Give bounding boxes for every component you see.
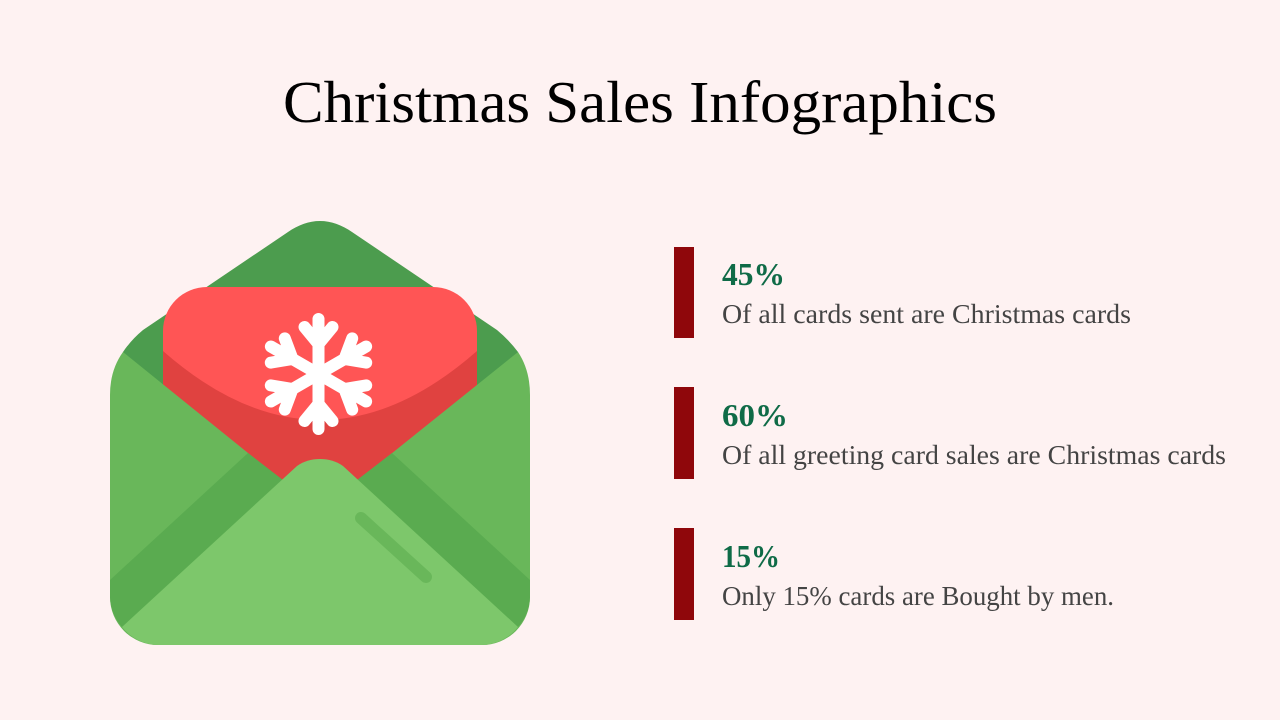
value: 15% — [722, 538, 780, 574]
envelope front flap — [122, 459, 518, 645]
stat: 15% — [674, 528, 1114, 620]
stat: 45% — [674, 247, 1131, 338]
description: Of all greeting card sales are Christmas cards — [722, 440, 1226, 470]
bar — [674, 247, 694, 338]
stat: 60% — [674, 387, 1226, 479]
value: 45% — [722, 256, 785, 292]
icon: snowflake — [264, 319, 373, 429]
value: 60% — [722, 397, 788, 433]
envelope side panels — [110, 352, 530, 645]
envelope back flap — [110, 221, 530, 500]
icon: open envelope with card — [110, 221, 530, 645]
flap highlight — [361, 518, 426, 577]
description: Only 15% cards are Bought by men. — [722, 581, 1114, 611]
red card — [163, 287, 477, 500]
envelope side shadows — [110, 453, 530, 627]
bar — [674, 387, 694, 479]
title: Christmas Sales Infographics — [283, 69, 997, 135]
bar — [674, 528, 694, 620]
description: Of all cards sent are Christmas cards — [722, 299, 1131, 329]
